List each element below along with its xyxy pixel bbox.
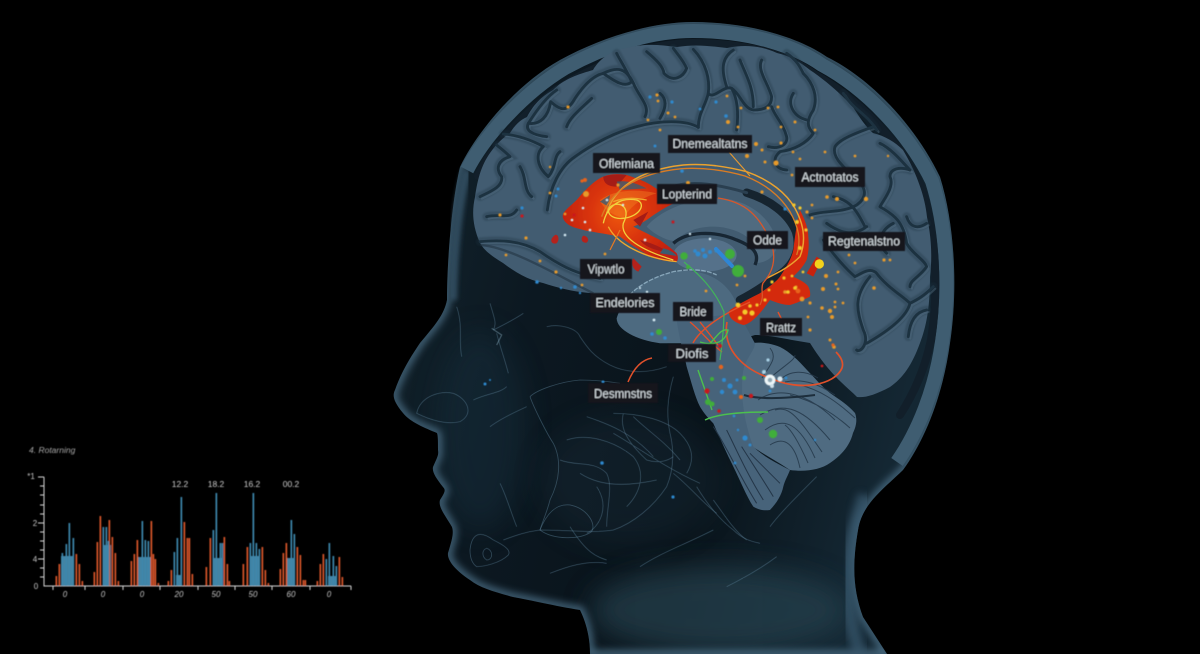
nodes: [484, 93, 891, 499]
y axis labels: 4: [33, 555, 38, 564]
red activation: rear: [729, 210, 824, 325]
skull rim: [452, 31, 946, 462]
label: Odde: Odde: [753, 234, 782, 248]
y axis labels: 0: [34, 582, 39, 591]
x axis labels: 0: [140, 590, 145, 599]
head silhouette: [394, 22, 954, 654]
label: Vipwtlo: Vipwtlo: [588, 262, 625, 276]
label: Regtenalstno: Regtenalstno: [828, 234, 900, 248]
sulci highlight: [482, 50, 935, 353]
bar chart: [27, 445, 351, 599]
x axis labels: 0: [63, 590, 68, 599]
x axis labels: 50: [249, 590, 258, 599]
peak labels: 18.2: [208, 479, 225, 489]
chart title: 4. Rotarning: [29, 445, 76, 455]
label: Rrattz: Rrattz: [766, 321, 796, 335]
x axis labels: 0: [327, 590, 332, 599]
label: Bride: Bride: [680, 305, 707, 319]
y axis labels: *1: [27, 472, 35, 481]
label: Desmnstns: Desmnstns: [594, 387, 652, 401]
label: Vipwtlo: [580, 259, 632, 279]
activation tracts: [602, 152, 843, 420]
label: Endelories: Endelories: [596, 296, 654, 310]
label: Actnotatos: Actnotatos: [802, 170, 858, 184]
face wisps: [417, 303, 817, 587]
label: Regtenalstno: [823, 232, 905, 251]
label: Desmnstns: [588, 383, 658, 403]
inner structures: [480, 184, 798, 343]
x axis labels: 0: [101, 590, 106, 599]
brainstem: [677, 313, 790, 510]
label: Actnotatos: [795, 167, 865, 187]
label: Diofis: Diofis: [676, 347, 708, 361]
chart axes: [38, 477, 351, 590]
label: Rrattz: [760, 318, 802, 336]
x axis labels: 50: [212, 590, 221, 599]
label: Odde: [747, 231, 788, 249]
orange bars: [56, 516, 343, 586]
label: Diofis: [668, 344, 716, 362]
label: Oflemiana: Oflemiana: [599, 157, 654, 171]
sulci: [480, 48, 933, 351]
y axis labels: 2: [33, 519, 38, 528]
dark crescent: [740, 193, 798, 300]
y axis labels: [27, 472, 39, 591]
peak labels: 00.2: [283, 479, 300, 489]
thalamus: [673, 238, 737, 272]
x axis labels: 60: [287, 590, 296, 599]
red activation: frontal: [551, 174, 678, 272]
x axis labels: [63, 590, 332, 599]
light blue fill: [61, 545, 336, 586]
label: Bride: [673, 302, 713, 321]
cerebellum: [741, 343, 856, 471]
brain: [473, 45, 935, 397]
cerebrum mass: [473, 45, 931, 397]
label: Lopterind: Lopterind: [662, 188, 712, 202]
label: Endelories: [590, 293, 660, 313]
label: Lopterind: [657, 184, 717, 204]
sulci soft shade: [480, 48, 933, 351]
peak labels: 16.2: [244, 479, 261, 489]
blue bars: [62, 493, 337, 586]
midbrain dome: [617, 271, 737, 343]
label: Oflemiana: [593, 153, 660, 173]
x axis labels: 20: [174, 590, 184, 599]
label: Dnemealtatns: Dnemealtatns: [672, 137, 748, 151]
corpus callosum: [647, 198, 777, 263]
peak labels: [172, 479, 300, 489]
peak labels: 12.2: [172, 479, 189, 489]
